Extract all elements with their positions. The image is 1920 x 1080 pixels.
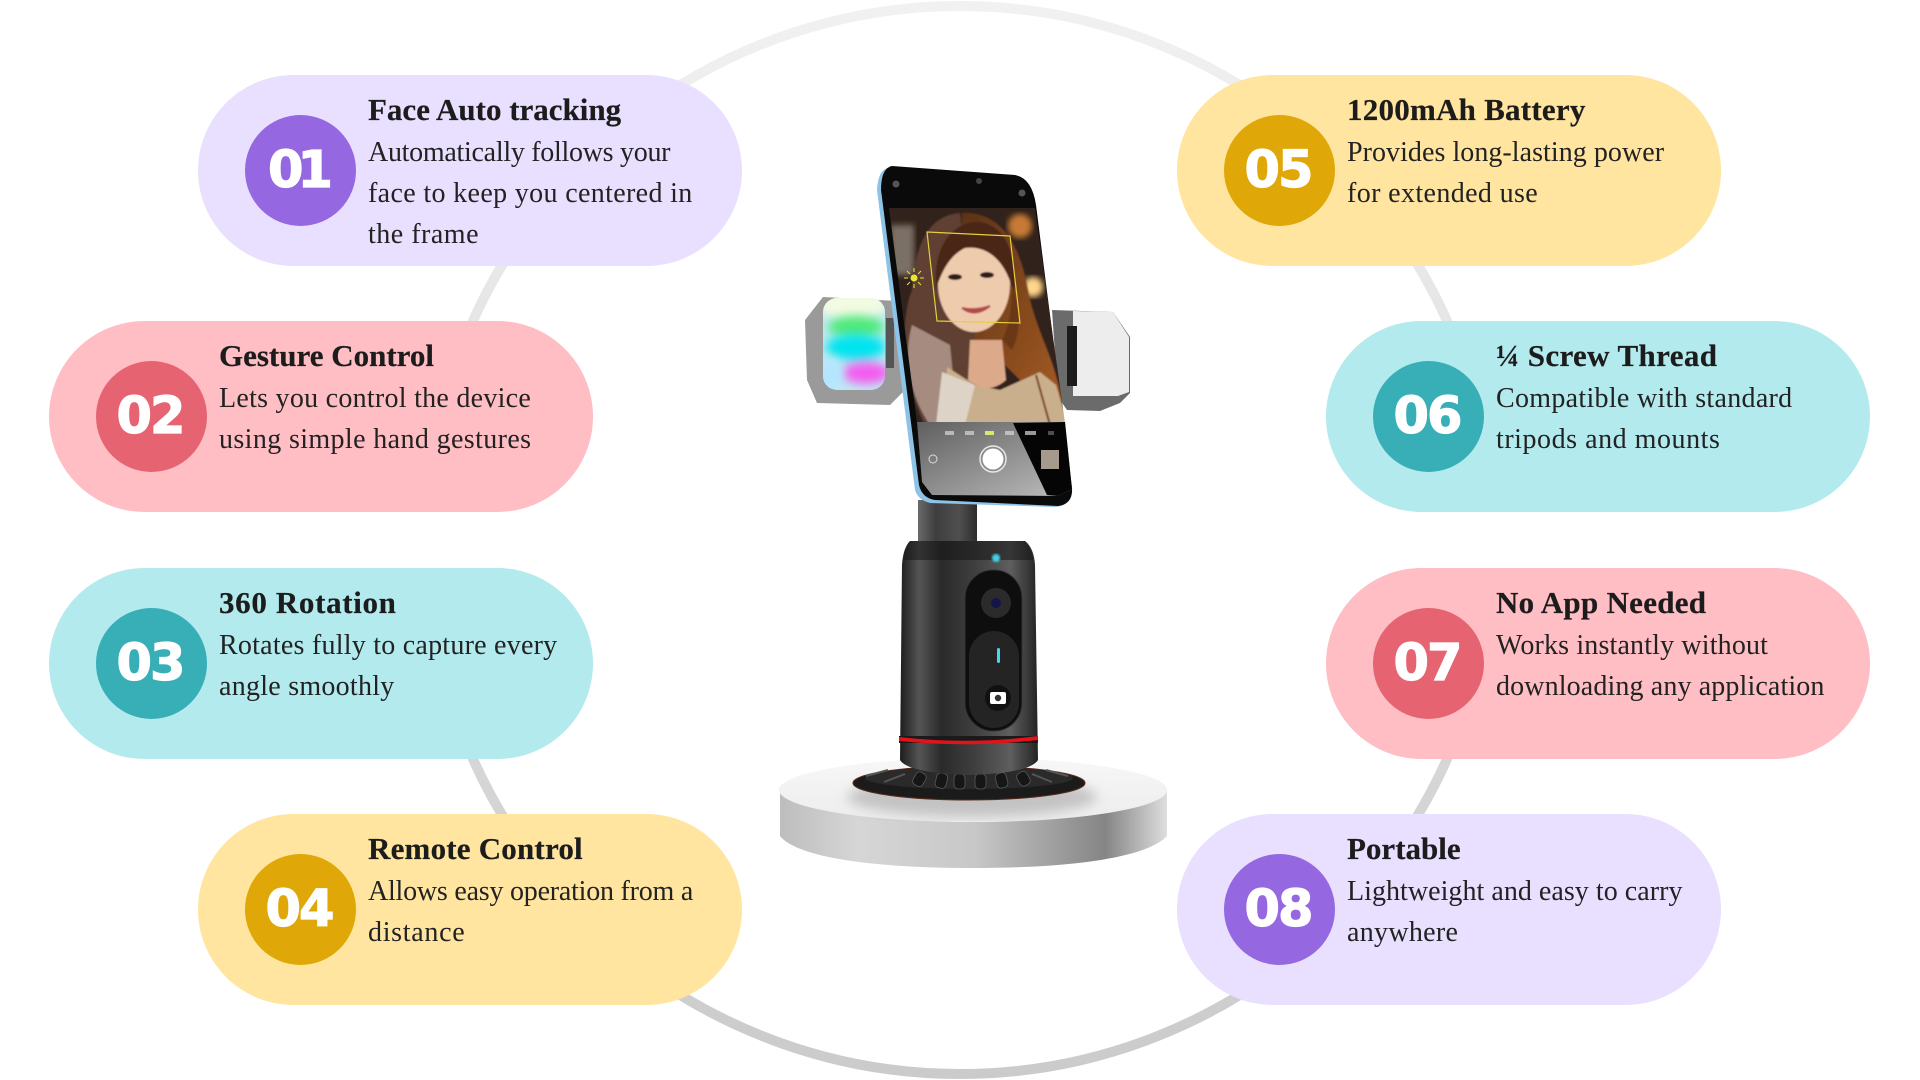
description 03: angle smoothly xyxy=(219,671,395,702)
description 08 xyxy=(1347,876,1682,948)
description 07 xyxy=(1496,630,1825,702)
description 05 xyxy=(1347,137,1664,209)
description 07: downloading any application xyxy=(1496,671,1825,702)
heading 04: Remote Control xyxy=(368,831,583,866)
description 04: distance xyxy=(368,917,465,948)
description 07: Works instantly without xyxy=(1496,630,1768,661)
badge 04: 04 xyxy=(266,880,332,939)
badge 04 xyxy=(245,854,356,965)
description 06: tripods and mounts xyxy=(1496,424,1720,455)
description 01: the frame xyxy=(368,219,479,250)
description 02 xyxy=(219,383,531,455)
badge 05 xyxy=(1224,115,1335,226)
badge 08: 08 xyxy=(1244,880,1311,939)
face tracking frame xyxy=(927,232,1020,323)
description 06 xyxy=(1496,383,1792,455)
description 05: Provides long-lasting power xyxy=(1347,137,1664,168)
description 08: anywhere xyxy=(1347,917,1458,948)
heading 07: No App Needed xyxy=(1496,585,1706,620)
badge 07: 07 xyxy=(1394,634,1460,693)
heading 02: Gesture Control xyxy=(219,338,434,373)
description 04 xyxy=(368,876,693,948)
product illustration: phone holder on pedestal xyxy=(779,166,1167,868)
description 01: face to keep you centered in xyxy=(368,178,693,209)
badge 02: 02 xyxy=(116,387,183,446)
description 04: Allows easy operation from a xyxy=(368,876,693,907)
left RGB fill light xyxy=(805,297,903,405)
feature pill 07 xyxy=(1326,568,1870,759)
badge 02 xyxy=(96,361,207,472)
badge 06 xyxy=(1373,361,1484,472)
description 08: Lightweight and easy to carry xyxy=(1347,876,1682,907)
feature pill 08 xyxy=(1177,814,1721,1005)
badge 01: 01 xyxy=(268,141,327,200)
description 01 xyxy=(368,137,693,250)
feature pill 06 xyxy=(1326,321,1870,512)
badge 03 xyxy=(96,608,207,719)
description 03 xyxy=(219,630,557,702)
pedestal xyxy=(779,758,1167,868)
feature pill 04 xyxy=(198,814,742,1005)
heading 08: Portable xyxy=(1347,831,1461,866)
exposure sun icon xyxy=(904,268,924,288)
feature pill 03 xyxy=(49,568,593,759)
device body with camera and red band xyxy=(899,500,1038,775)
phone camera photo xyxy=(880,205,1070,425)
right white fill light xyxy=(1052,310,1130,411)
description 03: Rotates fully to capture every xyxy=(219,630,557,661)
description 02: Lets you control the device xyxy=(219,383,531,414)
feature pill 01 xyxy=(198,75,742,266)
badge 03: 03 xyxy=(116,634,183,693)
heading 05: 1200mAh Battery xyxy=(1347,92,1586,127)
heading 06: ¼ Screw Thread xyxy=(1496,338,1717,373)
badge 08 xyxy=(1224,854,1335,965)
camera control bar xyxy=(917,422,1072,496)
device base plate xyxy=(853,766,1085,800)
badge 05: 05 xyxy=(1244,141,1311,200)
badge 07 xyxy=(1373,608,1484,719)
feature pill 02 xyxy=(49,321,593,512)
feature pill 05 xyxy=(1177,75,1721,266)
badge 01 xyxy=(245,115,356,226)
description 02: using simple hand gestures xyxy=(219,424,531,455)
badge 06: 06 xyxy=(1394,387,1460,446)
description 01: Automatically follows your xyxy=(368,137,670,168)
heading 01: Face Auto tracking xyxy=(368,92,621,127)
smartphone xyxy=(877,166,1072,507)
description 06: Compatible with standard xyxy=(1496,383,1792,414)
heading 03: 360 Rotation xyxy=(219,585,397,620)
description 05: for extended use xyxy=(1347,178,1538,209)
